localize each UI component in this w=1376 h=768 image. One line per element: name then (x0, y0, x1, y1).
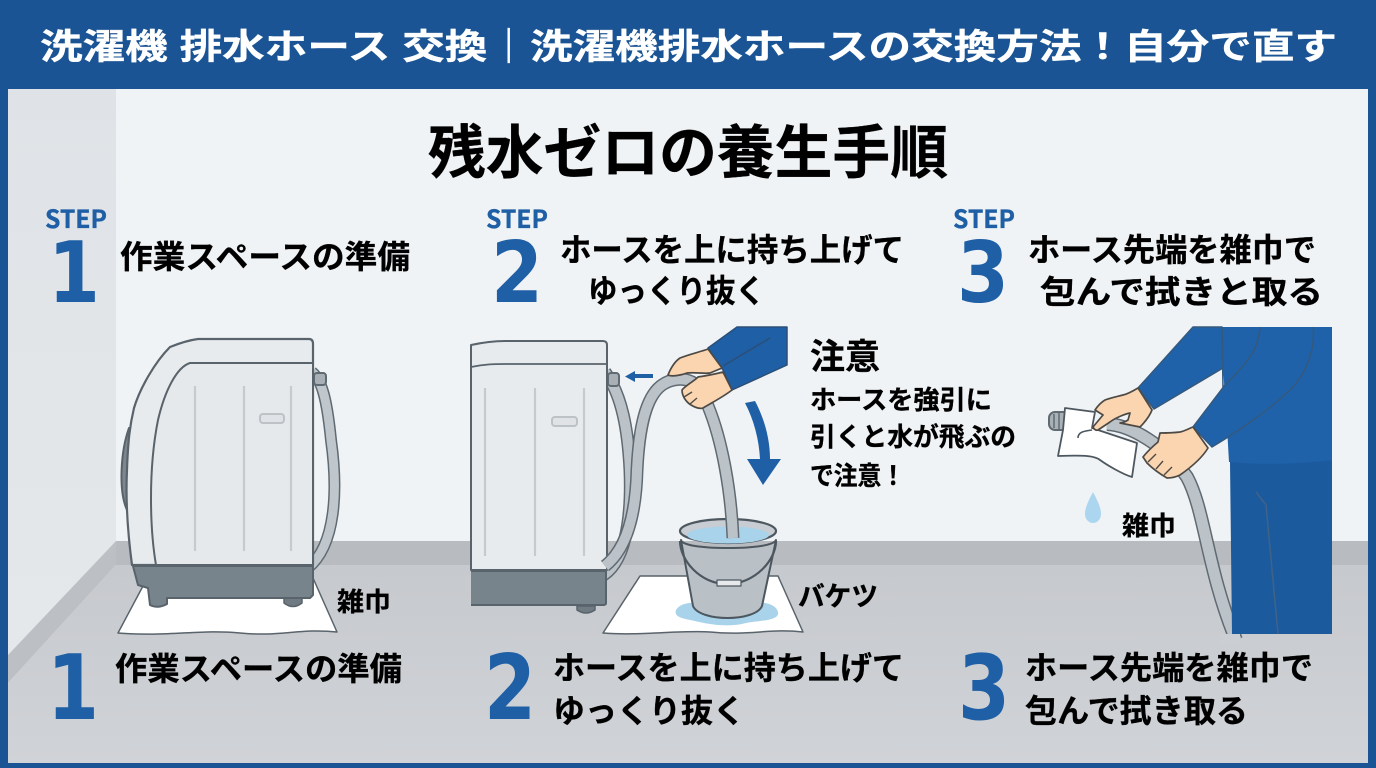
caution heading: 注意 (810, 338, 880, 377)
torso (1193, 327, 1332, 464)
caption 3 text (1025, 650, 1313, 729)
washer handle (260, 414, 284, 423)
fixed hose (600, 372, 630, 577)
far arm (1138, 327, 1223, 409)
caption 1 (47, 636, 402, 741)
rear drum bump (121, 428, 129, 510)
step 1 number: 1 (48, 224, 100, 323)
illustration: washing machine with cloth (118, 339, 337, 634)
caution body (810, 385, 1016, 491)
nozzle (1049, 412, 1069, 430)
cloth under bucket (603, 576, 803, 634)
large down arrow (745, 401, 781, 485)
illustration: pulling hose to bucket (471, 327, 803, 634)
finger lines (684, 392, 697, 404)
lower hand (682, 372, 732, 408)
caption 2 number: 2 (484, 636, 536, 741)
trouser crease (1256, 492, 1278, 634)
water drop (1085, 492, 1101, 523)
step 1 header (45, 200, 410, 323)
lifted hose (605, 379, 733, 566)
upper hand (668, 349, 722, 376)
step 3 heading: 包んで拭きと取る (1040, 274, 1323, 310)
label: cloth 3: 雑巾 (1122, 511, 1176, 541)
illustration: wiping hose with cloth (1049, 327, 1332, 644)
small left arrow (625, 371, 653, 382)
finger lines (1148, 454, 1172, 475)
step 3 label: STEP (953, 200, 1015, 236)
step 2 heading (560, 232, 904, 309)
lower hand (1143, 427, 1208, 478)
near arm (1193, 327, 1332, 447)
main heading: 残水ゼロの養生手順 (428, 121, 948, 186)
step 3 heading: ホース先端を雑巾で (1028, 232, 1316, 268)
cloth fold (1078, 430, 1092, 438)
caution body: 引くと水が飛ぶの (810, 422, 1016, 452)
caption 3 text: 包んで拭き取る (1025, 693, 1248, 729)
caption 2 text (553, 650, 904, 729)
washer base with front foot (133, 566, 313, 607)
floor patch below hose end (1220, 634, 1240, 644)
panel lines (195, 386, 291, 551)
cloth under washer (118, 578, 337, 634)
step 2 number: 2 (491, 224, 543, 323)
caption 2 (484, 636, 904, 741)
caption 1 text: 作業スペースの準備 (115, 651, 402, 687)
caution body: で注意！ (810, 461, 905, 491)
step 2 heading: ホースを上に持ち上げて (560, 232, 904, 268)
cloth (1058, 408, 1137, 477)
step 3 header (953, 200, 1323, 323)
caption 3 text: ホース先端を雑巾で (1025, 650, 1313, 686)
step 2 heading: ゆっくり抜く (588, 273, 765, 309)
sleeve creases (1193, 327, 1313, 447)
caption 2 text: ホースを上に持ち上げて (553, 650, 904, 686)
step 3 heading (1028, 232, 1323, 310)
trousers (1230, 460, 1332, 634)
step 3 number: 3 (957, 224, 1009, 323)
washer body (127, 339, 313, 565)
washer partial (471, 341, 607, 613)
caption 1 number: 1 (47, 636, 99, 741)
label: cloth 1: 雑巾 (337, 587, 391, 617)
caption 3 (958, 636, 1313, 741)
step 1 heading: 作業スペースの準備 (120, 239, 410, 275)
caption 3 number: 3 (958, 636, 1010, 741)
caution note (810, 338, 1016, 491)
step 2 label: STEP (486, 200, 548, 236)
step 1 label: STEP (45, 200, 107, 236)
upper hand (1093, 388, 1152, 430)
blue sleeve arm (708, 327, 787, 390)
title text: 洗濯機 排水ホース 交換｜洗濯機排水ホースの交換方法！自分で直す (40, 28, 1337, 67)
hose (1107, 424, 1236, 640)
label: bucket: バケツ (798, 582, 878, 612)
bucket back (680, 519, 776, 544)
washer door panel (151, 363, 313, 565)
bucket front (680, 540, 776, 618)
caution body: ホースを強引に (810, 385, 992, 415)
step 2 header (486, 200, 904, 323)
water puddle (676, 602, 778, 625)
title bar (0, 0, 1376, 89)
rear foot (284, 597, 302, 606)
drain hose (308, 372, 334, 568)
caption 2 text: ゆっくり抜く (553, 693, 745, 729)
